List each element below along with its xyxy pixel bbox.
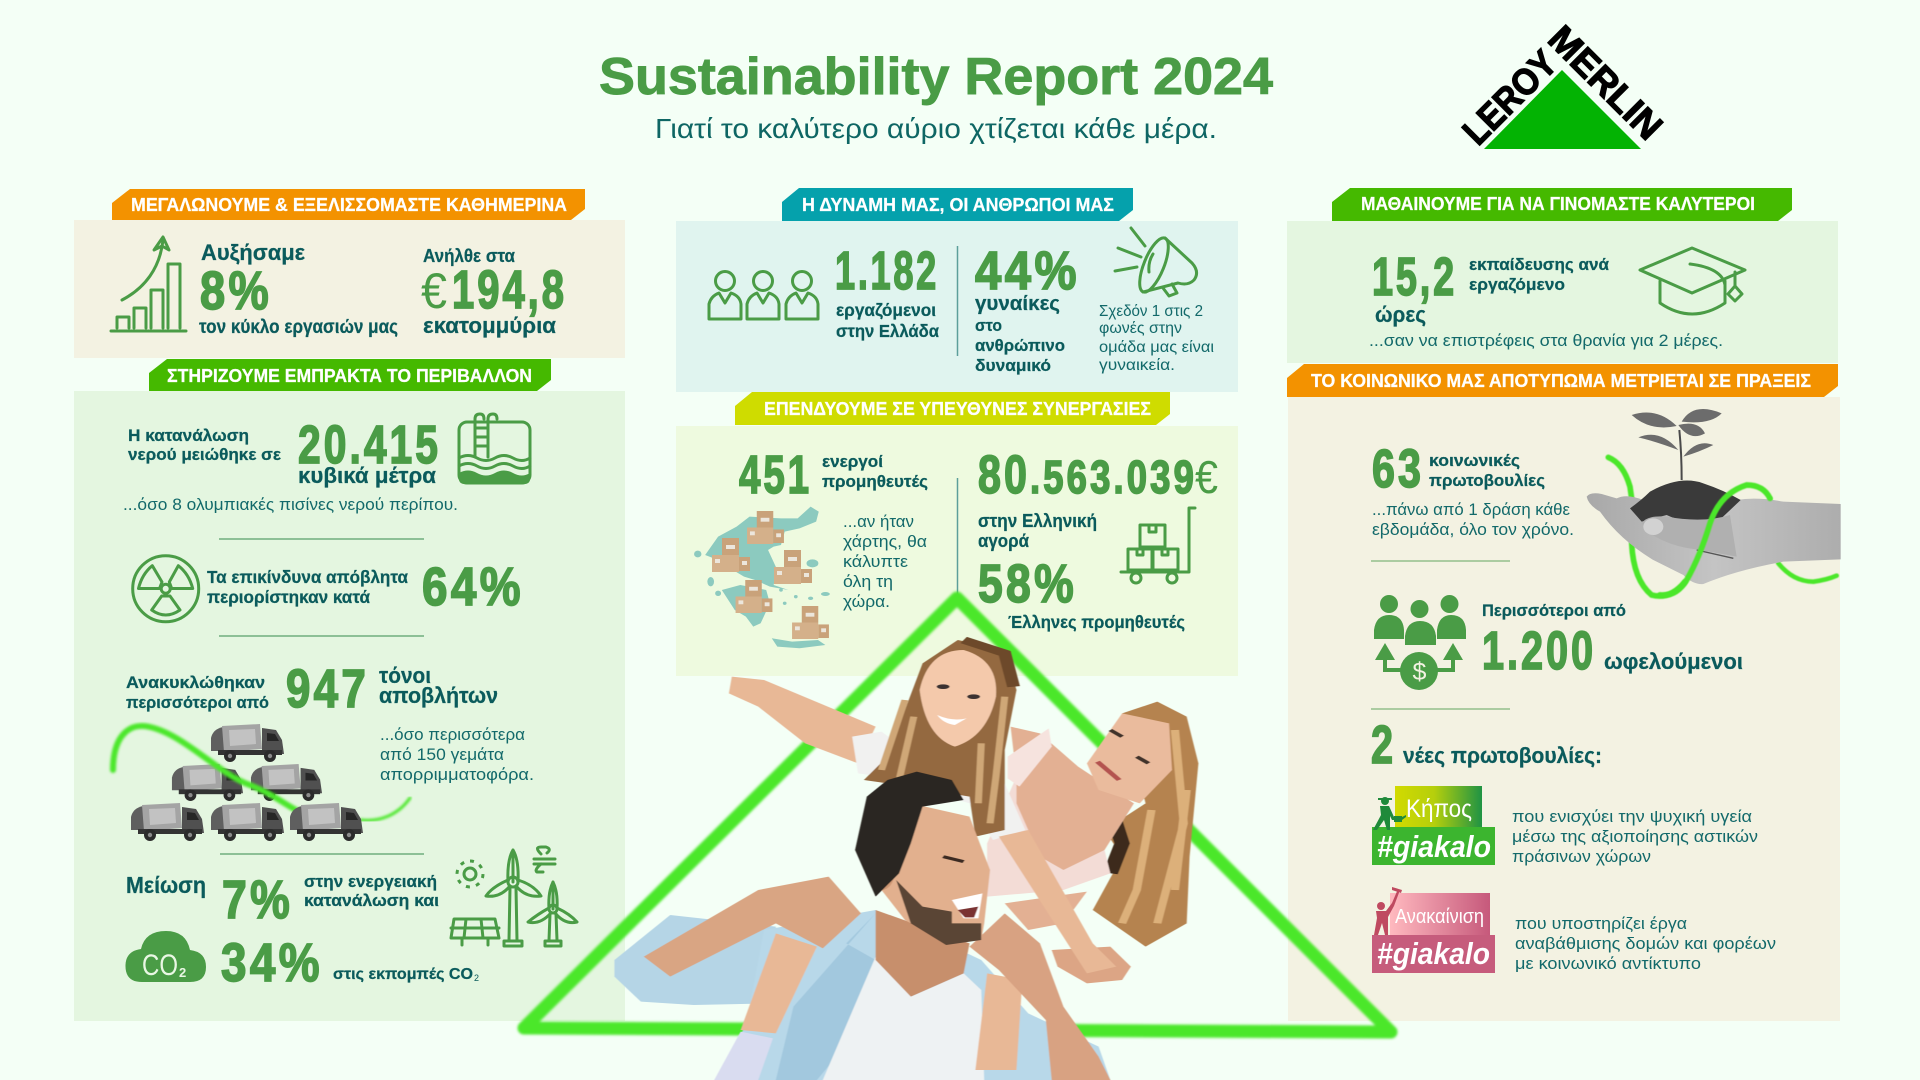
section tab: environment: ΣΤΗΡΙΖΟΥΜΕ ΕΜΠΡΑΚΤΑ ΤΟ ΠΕΡΙΒΑΛΛΟΝ (167, 366, 532, 386)
icon: graduation cap (1640, 248, 1745, 314)
beneficiaries stat: ωφελούμενοι (1604, 649, 1743, 674)
icon: CO2 cloud: 2 (179, 965, 186, 980)
hazardous waste stat: Τα επικίνδυνα απόβλητα (207, 567, 408, 587)
Κήπος description (1512, 807, 1758, 866)
water stat: 20.415 (298, 415, 441, 475)
recycling stat: Ανακυκλώθηκαν (126, 673, 265, 692)
suppliers note: κάλυπτε (843, 552, 908, 571)
section tab: growth: ΜΕΓΑΛΩΝΟΥΜΕ & ΕΞΕΛΙΣΣΟΜΑΣΤΕ ΚΑΘΗΜΕΡΙΝΑ (131, 195, 567, 215)
revenue stat: Ανήλθε στα (423, 246, 515, 266)
market value stat (978, 445, 1218, 551)
panel: growth (74, 189, 625, 358)
subtitle: Γιατί το καλύτερο αύριο χτίζεται κάθε μέρα. (655, 113, 1217, 144)
suppliers note: χώρα. (843, 592, 890, 611)
icon: CO2 cloud: CO (142, 949, 178, 982)
Greek suppliers stat: Έλληνες προμηθευτές (1008, 612, 1185, 632)
recycling stat: 947 (286, 659, 369, 719)
suppliers note: ...αν ήταν (843, 512, 914, 531)
emissions stat (221, 933, 479, 993)
beneficiaries stat (1482, 601, 1743, 681)
women stat: δυναμικό (975, 356, 1051, 375)
water stat: Η κατανάλωση (128, 426, 249, 445)
panel: partnerships (676, 392, 1238, 676)
emissions stat: 2 (474, 973, 479, 983)
initiatives note: ...πάνω από 1 δράση κάθε (1372, 500, 1570, 519)
hazardous waste stat: περιορίστηκαν κατά (207, 587, 370, 607)
training stat: ώρες (1375, 302, 1426, 327)
employees stat: στην Ελλάδα (836, 321, 939, 341)
hazardous waste stat (207, 557, 524, 617)
icon: radiation (133, 556, 199, 622)
icon: gardener (1373, 797, 1406, 830)
Greek suppliers stat: 58% (978, 554, 1077, 614)
employees stat (835, 241, 939, 341)
market value stat: αγορά (978, 531, 1029, 551)
water stat: κυβικά μέτρα (298, 463, 436, 488)
Κήπος description: πράσινων χώρων (1512, 847, 1651, 866)
icon: cart with boxes (1121, 508, 1195, 583)
suppliers note: όλη τη (843, 572, 893, 591)
badge: Κήπος #giakalo (1372, 786, 1495, 865)
recycling stat: περισσότεροι από (126, 693, 269, 712)
market value stat: στην Ελληνική (978, 511, 1097, 531)
icon: megaphone (1115, 228, 1197, 296)
women note: ομάδα μας είναι (1099, 339, 1214, 356)
badge: Κήπος #giakalo: Κήπος (1406, 795, 1472, 823)
logo: Leroy Merlin (1455, 18, 1670, 153)
beneficiaries stat: 1.200 (1482, 621, 1596, 681)
training stat: εκπαίδευσης ανά (1469, 255, 1610, 274)
section tab: social (1287, 364, 1838, 397)
women stat: ανθρώπινο (975, 336, 1065, 355)
revenue stat (421, 246, 567, 338)
recycling note: από 150 γεμάτα (380, 745, 504, 764)
energy stat: 7% (222, 870, 293, 930)
badge: Ανακαίνιση #giakalo (1372, 887, 1495, 973)
panel: environment (74, 359, 625, 1021)
Κήπος description: μέσω της αξιοποίησης αστικών (1512, 827, 1758, 846)
badge: Ανακαίνιση #giakalo: Ανακαίνιση (1395, 906, 1484, 928)
badge: Κήπος #giakalo: #giakalo (1377, 829, 1491, 864)
energy stat: Μείωση (126, 872, 206, 898)
recycling stat (126, 659, 498, 719)
Greek suppliers stat (978, 554, 1185, 632)
revenue stat: € (421, 263, 447, 319)
section tab: people (782, 188, 1133, 221)
woman (987, 702, 1198, 983)
icon: beneficiaries with dollar: $ (1412, 658, 1426, 686)
icon: CO2 cloud (125, 931, 206, 982)
panel: social (1287, 364, 1841, 1021)
water stat (128, 415, 441, 488)
initiatives note (1372, 500, 1574, 539)
women note: γυναικεία. (1099, 357, 1175, 374)
revenue stat: εκατομμύρια (423, 313, 556, 338)
section tab: learning (1332, 188, 1792, 221)
suppliers stat: ενεργοί (822, 452, 883, 471)
section tab: learning: ΜΑΘΑΙΝΟΥΜΕ ΓΙΑ ΝΑ ΓΙΝΟΜΑΣΤΕ ΚΑΛΥΤΕΡΟΙ (1361, 194, 1755, 214)
title: Sustainability Report 2024 (599, 48, 1273, 106)
Ανακαίνιση description (1515, 914, 1776, 973)
energy stat: στην ενεργειακή (304, 872, 437, 891)
initiatives stat: κοινωνικές (1429, 451, 1520, 470)
section tab: partnerships (735, 392, 1170, 425)
man (614, 772, 1110, 1080)
emissions stat: στις εκπομπές CO (333, 966, 473, 983)
women stat (975, 241, 1080, 375)
recycling stat: αποβλήτων (379, 683, 498, 708)
suppliers note (843, 512, 927, 611)
market value stat: 80 (978, 445, 1030, 505)
hazardous waste stat: 64% (422, 557, 524, 617)
women stat: γυναίκες (975, 293, 1060, 315)
energy stat: κατανάλωση και (304, 891, 439, 910)
logo: Leroy Merlin: LEROY (1455, 42, 1565, 153)
growth stat 8% (199, 240, 398, 338)
women note: Σχεδόν 1 στις 2 (1099, 303, 1203, 320)
training stat: 15,2 (1372, 247, 1457, 307)
icon: pool (459, 414, 530, 484)
image: hand holding seedling (1587, 409, 1841, 596)
recycling note (380, 725, 534, 784)
growth stat 8%: τον κύκλο εργασιών μας (199, 317, 398, 338)
section tab: partnerships: ΕΠΕΝΔΥΟΥΜΕ ΣΕ ΥΠΕΥΘΥΝΕΣ ΣΥΝΕΡΓΑΣΙΕΣ (764, 399, 1151, 419)
emissions stat: 34% (221, 933, 323, 993)
new initiatives heading: 2 (1371, 715, 1396, 775)
initiatives stat: πρωτοβουλίες (1429, 471, 1545, 490)
training note: ...σαν να επιστρέφεις στα θρανία για 2 μέρες. (1369, 331, 1723, 350)
panel: learning (1287, 188, 1838, 363)
women stat: στο (975, 316, 1002, 335)
recycling note: απορριμματοφόρα. (380, 765, 534, 784)
logo: Leroy Merlin: MERLIN (1540, 18, 1670, 148)
icon: employees (709, 272, 818, 319)
women note: φωνές στην (1099, 320, 1182, 337)
revenue stat: 194,8 (452, 260, 567, 320)
initiatives stat (1372, 439, 1545, 499)
water stat: νερού μειώθηκε σε (128, 445, 281, 464)
panel: people (676, 188, 1238, 392)
section tab: social: ΤΟ ΚΟΙΝΩΝΙΚΟ ΜΑΣ ΑΠΟΤΥΠΩΜΑ ΜΕΤΡΙΕΤΑΙ ΣΕ ΠΡΑΞΕΙΣ (1311, 371, 1811, 391)
section tab: environment (149, 359, 551, 391)
suppliers stat: 451 (739, 445, 812, 505)
Κήπος description: που ενισχύει την ψυχική υγεία (1512, 807, 1752, 826)
girl (729, 640, 1116, 973)
employees stat: 1.182 (835, 241, 939, 301)
growth stat 8%: 8% (200, 261, 272, 321)
Ανακαίνιση description: με κοινωνικό αντίκτυπο (1515, 954, 1701, 973)
photo: family (614, 640, 1198, 1080)
beneficiaries stat: Περισσότεροι από (1482, 601, 1626, 620)
icon: renewable energy (451, 847, 577, 946)
Ανακαίνιση description: που υποστηρίζει έργα (1515, 914, 1687, 933)
suppliers note: χάρτης, θα (843, 532, 927, 551)
recycling stat: τόνοι (379, 663, 431, 688)
icon: beneficiaries with dollar (1374, 595, 1466, 690)
section tab: people: Η ΔΥΝΑΜΗ ΜΑΣ, ΟΙ ΑΝΘΡΩΠΟΙ ΜΑΣ (802, 195, 1114, 215)
market value stat: € (1195, 451, 1218, 503)
initiatives stat: 63 (1372, 439, 1424, 499)
new initiatives heading: νέες πρωτοβουλίες: (1403, 743, 1602, 768)
icon: painter (1374, 887, 1402, 935)
icon: map of Greece with boxes (694, 507, 830, 648)
suppliers stat: προμηθευτές (822, 472, 928, 491)
water note: ...όσο 8 ολυμπιακές πισίνες νερού περίπου. (123, 495, 458, 514)
women stat: 44% (975, 241, 1080, 301)
training stat: εργαζόμενο (1469, 275, 1565, 294)
market value stat: .563.039 (1030, 451, 1197, 503)
section tab: growth (112, 189, 585, 220)
green triangle outline (524, 598, 1391, 1032)
suppliers stat (739, 445, 928, 505)
energy stat (126, 870, 439, 930)
initiatives note: εβδομάδα, όλο τον χρόνο. (1372, 520, 1574, 539)
women note (1099, 303, 1214, 374)
badge: Ανακαίνιση #giakalo: #giakalo (1377, 936, 1490, 971)
icon: growth chart (111, 237, 186, 331)
training stat (1372, 247, 1610, 327)
Ανακαίνιση description: αναβάθμισης δομών και φορέων (1515, 934, 1776, 953)
growth stat 8%: Αυξήσαμε (201, 240, 306, 265)
recycling note: ...όσο περισσότερα (380, 725, 525, 744)
icon: garbage trucks (113, 724, 410, 841)
employees stat: εργαζόμενοι (836, 300, 936, 321)
new initiatives heading (1371, 715, 1602, 775)
